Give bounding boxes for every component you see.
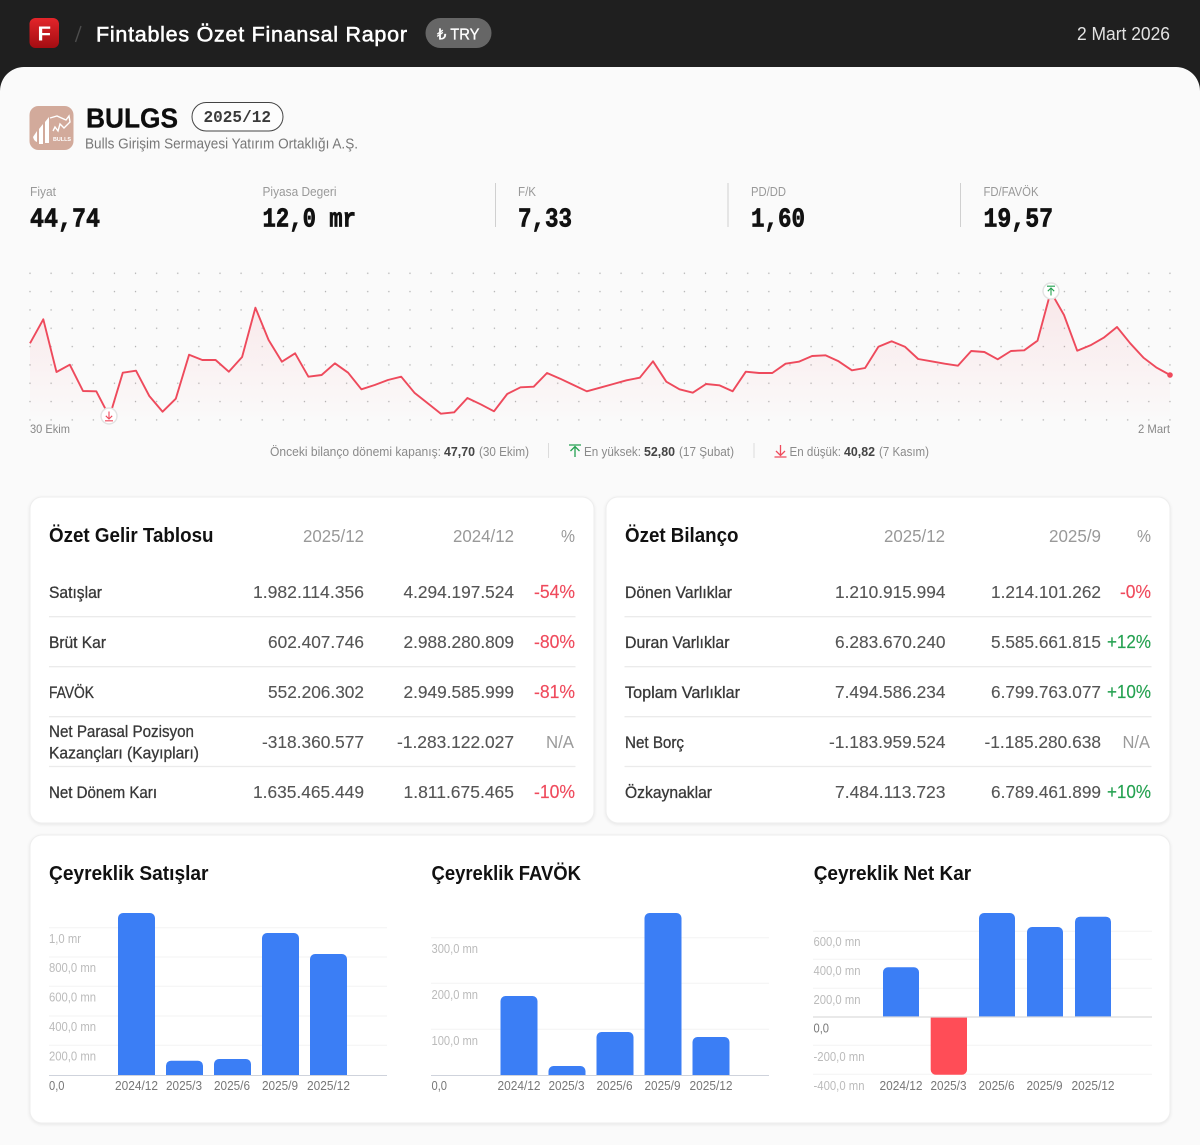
bar chart: quarterly net profit: 2025/12 (1072, 1079, 1115, 1093)
row: Duran Varlıklar: +12% (1107, 632, 1151, 652)
highest price: En yüksek: (584, 444, 641, 459)
row: Toplam Varlıklar (625, 682, 1151, 702)
bar chart: quarterly EBITDA: 300,0 mn (432, 942, 478, 956)
separator slash (76, 26, 81, 42)
balance sheet column headers: 2025/12 (884, 526, 945, 546)
bar chart: quarterly net profit: 0,0 (814, 1022, 829, 1036)
icon: BULGS logo: BULLS (53, 137, 72, 143)
row: Net Dönem Karı (49, 782, 575, 802)
row: Dönen Varlıklar: 1.210.915.994 (835, 582, 946, 602)
row: Net Parasal Pozisyon: Net Parasal Pozisyon (49, 723, 194, 741)
row: Brüt Kar (49, 632, 575, 652)
company header (30, 102, 358, 152)
row: Özkaynaklar: Özkaynaklar (625, 784, 712, 802)
currency pill (426, 18, 492, 48)
row: FAVÖK: 552.206.302 (268, 682, 364, 702)
chart start date: 30 Ekim (30, 422, 70, 436)
row: Net Borç (625, 732, 1151, 752)
panel: balance sheet (606, 497, 1170, 823)
row: Satışlar (49, 582, 575, 602)
quarterly sales heading: Çeyreklik Satışlar (49, 863, 209, 885)
lowest price: En düşük: (790, 444, 841, 459)
row: Net Borç: -1.185.280.638 (984, 732, 1101, 752)
highest price: (17 Şubat) (679, 444, 734, 459)
metric: FD/FAVÖK (984, 184, 1053, 236)
row: Duran Varlıklar: 6.283.670.240 (835, 632, 946, 652)
previous close: 47,70 (444, 444, 475, 459)
highest price (569, 444, 734, 459)
report date: 2 Mart 2026 (1077, 24, 1170, 44)
bar chart: quarterly EBITDA: 2024/12 (498, 1079, 541, 1093)
bar chart: quarterly sales: 1,0 mr (49, 932, 81, 946)
row: FAVÖK: FAVÖK (49, 684, 94, 702)
metric: Fiyat: 44,74 (30, 206, 100, 236)
metric: F/K (518, 184, 572, 236)
icon: Fintables logo (30, 18, 59, 48)
row: Satışlar: Satışlar (49, 584, 102, 602)
icon: lowest point marker (101, 408, 117, 424)
price line (30, 292, 1170, 417)
icon: Fintables logo: F (38, 24, 51, 46)
bar chart: quarterly sales: 400,0 mn (49, 1020, 96, 1034)
income statement heading: Özet Gelir Tablosu (49, 524, 214, 547)
row: Net Dönem Karı: 1.811.675.465 (404, 782, 514, 802)
price summary line (270, 443, 929, 459)
header title: Fintables Özet Finansal Rapor (96, 22, 407, 46)
chart end date: 2 Mart (1138, 422, 1171, 436)
panel: income statement (30, 497, 594, 823)
header bar (0, 0, 1200, 90)
metric: F/K: F/K (518, 184, 536, 199)
bar chart: quarterly EBITDA: 100,0 mn (432, 1034, 478, 1048)
row: Toplam Varlıklar: 7.494.586.234 (835, 682, 946, 702)
row: Net Borç: N/A (1122, 732, 1151, 752)
row: Özkaynaklar: 6.789.461.899 (991, 782, 1101, 802)
bar chart: quarterly EBITDA: 2025/6 (596, 1079, 633, 1093)
row: Net Parasal Pozisyon: Kazançları (Kayıpları) (49, 744, 199, 762)
currency pill: ₺ TRY (437, 26, 480, 44)
row: FAVÖK: -81% (534, 682, 575, 702)
row: Toplam Varlıklar: Toplam Varlıklar (625, 684, 740, 702)
lowest price: 40,82 (844, 444, 875, 459)
bar chart: quarterly sales: 2024/12 (115, 1079, 158, 1093)
highest price: 52,80 (644, 444, 675, 459)
metric: PD/DD: 1,60 (751, 206, 805, 236)
previous close: Önceki bilanço dönemi kapanış: (270, 444, 441, 459)
row: Duran Varlıklar: 5.585.661.815 (991, 632, 1101, 652)
bar chart: quarterly EBITDA: 2025/9 (644, 1079, 681, 1093)
icon: highest point marker (1043, 283, 1059, 299)
period pill (192, 102, 283, 131)
bar chart: quarterly sales: 200,0 mn (49, 1050, 96, 1064)
metric: Fiyat: Fiyat (30, 184, 56, 199)
row: Dönen Varlıklar: -0% (1120, 582, 1151, 602)
row: Net Parasal Pozisyon: -318.360.577 (262, 732, 364, 752)
bar chart: quarterly net profit: 2025/3 (930, 1079, 967, 1093)
metric: PD/DD (751, 184, 805, 236)
row: Özkaynaklar: 7.484.113.723 (835, 782, 946, 802)
metric: FD/FAVÖK: 19,57 (984, 206, 1053, 236)
row: Brüt Kar: -80% (534, 632, 575, 652)
company name: Bulls Girişim Sermayesi Yatırım Ortaklığı A.Ş. (85, 136, 358, 152)
metric: Piyasa Degeri: 12,0 mr (262, 206, 356, 236)
income statement column headers: 2025/12 (303, 526, 364, 546)
bar chart: quarterly sales: 600,0 mn (49, 990, 96, 1004)
bar chart: quarterly net profit: 200,0 mn (814, 993, 861, 1007)
metric: Piyasa Degeri: Piyasa Degeri (262, 184, 337, 199)
row: Net Borç: Net Borç (625, 734, 684, 752)
row: Net Parasal Pozisyon (49, 723, 575, 762)
last price dot (1167, 372, 1173, 378)
bar chart: quarterly sales: 2025/9 (262, 1079, 298, 1093)
bar chart: quarterly net profit: 2024/12 (880, 1079, 923, 1093)
row: Brüt Kar: 2.988.280.809 (404, 632, 514, 652)
row: FAVÖK (49, 682, 575, 702)
metric: PD/DD: PD/DD (751, 184, 786, 199)
bar chart: quarterly EBITDA: 200,0 mn (432, 988, 478, 1002)
bar chart: quarterly net profit: 400,0 mn (814, 964, 861, 978)
key metrics row (30, 183, 1053, 236)
period pill: 2025/12 (204, 109, 271, 128)
row: Net Dönem Karı: 1.635.465.449 (253, 782, 364, 802)
quarterly EBITDA heading: Çeyreklik FAVÖK (432, 862, 582, 885)
row: Satışlar: 1.982.114.356 (253, 582, 364, 602)
row: Duran Varlıklar: Duran Varlıklar (625, 634, 730, 652)
panel: quarterly charts (30, 835, 1170, 1123)
row: Brüt Kar: 602.407.746 (268, 632, 364, 652)
row: FAVÖK: 2.949.585.999 (404, 682, 514, 702)
bar chart: quarterly sales: 2025/6 (214, 1079, 250, 1093)
row: Satışlar: 4.294.197.524 (404, 582, 514, 602)
row: Net Parasal Pozisyon: -1.283.122.027 (397, 732, 514, 752)
price line chart (29, 272, 1173, 436)
income statement column headers: % (561, 526, 575, 546)
bar chart: quarterly net profit: -400,0 mn (814, 1079, 865, 1093)
bar chart: quarterly net profit: 2025/9 (1026, 1079, 1063, 1093)
row: Duran Varlıklar (625, 632, 1151, 652)
row: Toplam Varlıklar: +10% (1107, 682, 1151, 702)
lowest price (774, 444, 929, 459)
bar chart: quarterly sales: 2025/3 (166, 1079, 202, 1093)
bar chart: quarterly EBITDA: 2025/12 (690, 1079, 733, 1093)
bar chart: quarterly sales: 800,0 mn (49, 961, 96, 975)
bar chart: quarterly sales: 2025/12 (307, 1079, 350, 1093)
row: Net Dönem Karı: Net Dönem Karı (49, 784, 157, 802)
row: Net Parasal Pozisyon: N/A (546, 732, 575, 752)
row: Toplam Varlıklar: 6.799.763.077 (991, 682, 1101, 702)
balance sheet column headers: 2025/9 (1049, 526, 1101, 546)
balance sheet heading: Özet Bilanço (625, 524, 738, 547)
bar chart: quarterly net profit (813, 863, 1152, 1093)
row: Özkaynaklar (625, 782, 1151, 802)
row: Dönen Varlıklar (625, 582, 1151, 602)
metric: Piyasa Degeri (262, 184, 356, 236)
bar chart: quarterly EBITDA: 2025/3 (548, 1079, 585, 1093)
previous close: (30 Ekim) (479, 444, 529, 459)
metric: FD/FAVÖK: FD/FAVÖK (984, 184, 1039, 199)
area under price line (30, 292, 1170, 421)
row: Özkaynaklar: +10% (1107, 782, 1151, 802)
quarterly net profit heading: Çeyreklik Net Kar (814, 863, 971, 885)
row: Net Dönem Karı: -10% (534, 782, 575, 802)
metric: F/K: 7,33 (518, 206, 572, 236)
row: Satışlar: -54% (534, 582, 575, 602)
bar chart: quarterly net profit: 2025/6 (978, 1079, 1015, 1093)
row: Brüt Kar: Brüt Kar (49, 634, 106, 652)
income statement column headers: 2024/12 (453, 526, 514, 546)
balance sheet column headers: % (1137, 526, 1151, 546)
bar chart: quarterly net profit: 600,0 mn (814, 935, 861, 949)
bar chart: quarterly EBITDA (431, 862, 769, 1093)
income statement column headers (303, 526, 575, 546)
ticker: BULGS (86, 102, 178, 134)
balance sheet column headers (884, 526, 1151, 546)
bar chart: quarterly sales (49, 863, 387, 1093)
row: Dönen Varlıklar: Dönen Varlıklar (625, 584, 732, 602)
bar chart: quarterly EBITDA: 0,0 (432, 1079, 447, 1093)
lowest price: (7 Kasım) (879, 444, 929, 459)
metric: Fiyat (30, 184, 100, 236)
row: Net Borç: -1.183.959.524 (829, 732, 946, 752)
row: Dönen Varlıklar: 1.214.101.262 (991, 582, 1101, 602)
bar chart: quarterly net profit: -200,0 mn (814, 1050, 865, 1064)
icon: BULGS logo (30, 106, 74, 150)
bar chart: quarterly sales: 0,0 (49, 1079, 65, 1093)
